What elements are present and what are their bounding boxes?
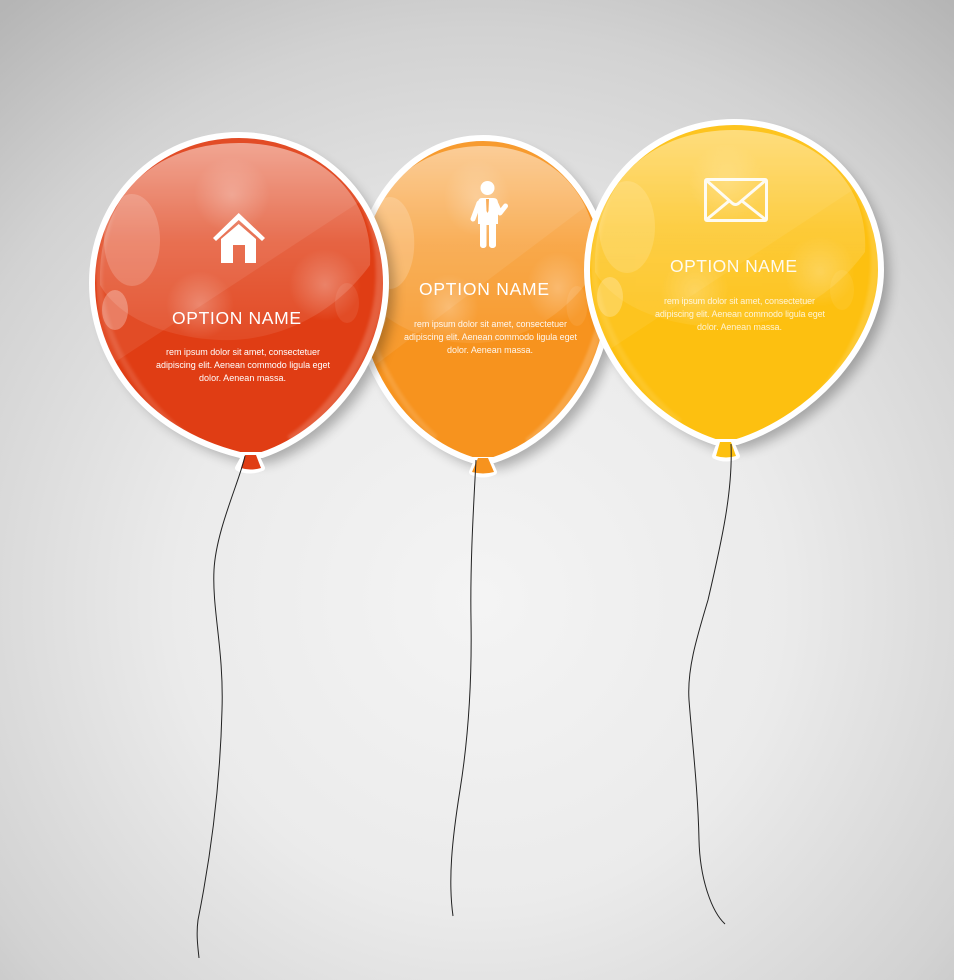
- string: yellow balloon: [689, 444, 731, 924]
- knot outline: orange: [472, 458, 494, 474]
- heading: option name orange: OPTION NAME: [419, 279, 549, 299]
- balloon body: orange: [356, 138, 610, 460]
- text block: red: adipiscing elit. Aenean commodo ligula eget: [156, 360, 330, 370]
- text block: yellow: rem ipsum dolor sit amet, consectetuer: [664, 296, 815, 306]
- balloon: orange: [368, 135, 612, 478]
- text block: yellow: [655, 296, 825, 332]
- shadow: red balloon: [100, 143, 394, 463]
- balloon body: yellow: [587, 122, 881, 442]
- knot outline: red: [238, 455, 262, 470]
- shadow: yellow balloon: [595, 130, 889, 450]
- text block: orange: dolor. Aenean massa.: [447, 345, 533, 355]
- text block: red: rem ipsum dolor sit amet, consectetuer: [166, 347, 320, 357]
- string: orange balloon: [451, 460, 476, 916]
- heading: option name red: OPTION NAME: [172, 308, 301, 328]
- gloss: red: [90, 120, 390, 440]
- text block: orange: [404, 319, 577, 355]
- string: red balloon: [197, 456, 245, 958]
- balloon: yellow: [585, 107, 889, 458]
- shadow: orange balloon: [364, 146, 618, 468]
- text block: orange: rem ipsum dolor sit amet, consectetuer: [414, 319, 567, 329]
- knot fill: orange: [472, 458, 494, 474]
- text block: red: dolor. Aenean massa.: [199, 373, 286, 383]
- knot outline: yellow: [715, 442, 737, 458]
- knot fill: red: [241, 455, 261, 470]
- icon: envelope: [706, 180, 766, 220]
- text block: red: [156, 347, 330, 383]
- text block: orange: adipiscing elit. Aenean commodo ligula eget: [404, 332, 577, 342]
- balloon body: red: [92, 135, 386, 455]
- heading: option name yellow: OPTION NAME: [670, 256, 797, 276]
- text block: yellow: dolor. Aenean massa.: [697, 322, 782, 332]
- knot fill: yellow: [716, 442, 736, 458]
- gloss: yellow: [591, 125, 878, 422]
- balloon: red: [90, 120, 394, 470]
- icon: house: [213, 213, 265, 263]
- text block: yellow: adipiscing elit. Aenean commodo ligula eget: [655, 309, 825, 319]
- gloss: orange: [372, 141, 600, 442]
- icon: person: [473, 181, 506, 248]
